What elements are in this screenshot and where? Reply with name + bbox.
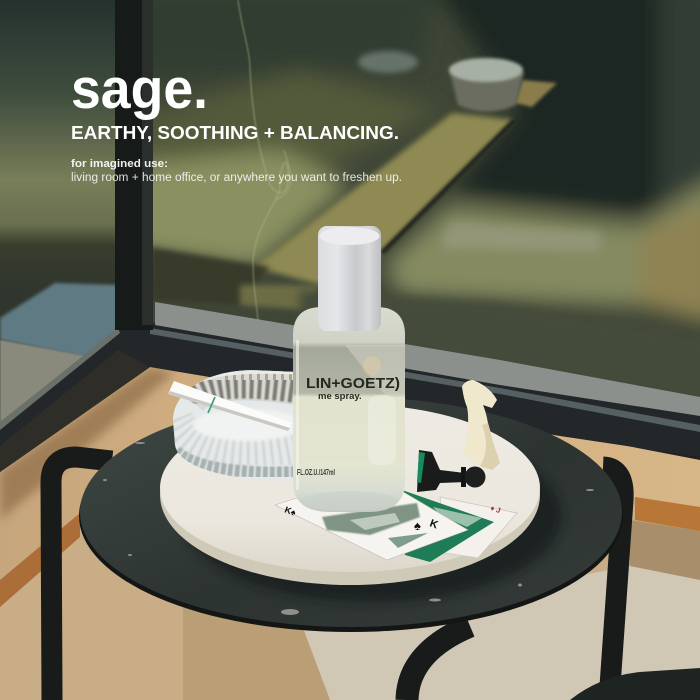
use description: living room + home office, or anywhere you want to freshen up. xyxy=(71,172,402,184)
wall below the ledge xyxy=(0,470,700,700)
marble tray xyxy=(160,404,540,585)
playing cards: K♠ xyxy=(283,504,298,518)
perfume bottle xyxy=(293,226,405,512)
playing cards: ♠ xyxy=(414,518,421,533)
stool seat corner xyxy=(570,668,700,700)
playing cards xyxy=(275,490,517,562)
subtitle: EARTHY, SOOTHING + BALANCING. xyxy=(71,122,399,143)
bottle cap xyxy=(318,226,381,331)
title: sage. xyxy=(71,57,208,121)
cigarette xyxy=(168,381,292,431)
wooden ledge xyxy=(0,367,700,580)
left window pane xyxy=(0,0,120,430)
stool legs xyxy=(51,457,623,700)
jack card xyxy=(440,497,517,558)
wooden plank seen through window xyxy=(255,113,515,285)
smoke wisps xyxy=(238,0,291,320)
playing cards: K xyxy=(428,518,440,532)
sunlit wall patch xyxy=(303,566,700,700)
chess knight xyxy=(462,380,500,470)
vertical window frame xyxy=(115,0,153,330)
playing cards: ♦ J xyxy=(489,503,502,515)
blurred bowls xyxy=(358,51,418,73)
bottle label xyxy=(297,376,400,477)
bottle label: me spray. xyxy=(318,391,362,402)
wear marks xyxy=(103,442,594,615)
right window pane xyxy=(153,0,700,397)
chess pawn xyxy=(417,450,486,492)
window sill and dark frame xyxy=(0,302,700,472)
glass ashtray xyxy=(173,370,293,482)
bottle label: FL.OZ.U./147ml xyxy=(297,468,335,477)
use label: for imagined use: xyxy=(71,158,168,170)
king card xyxy=(275,490,468,560)
green card xyxy=(402,490,494,562)
bottle label: LIN+GOETZ) xyxy=(306,376,400,392)
round table top xyxy=(79,397,623,632)
